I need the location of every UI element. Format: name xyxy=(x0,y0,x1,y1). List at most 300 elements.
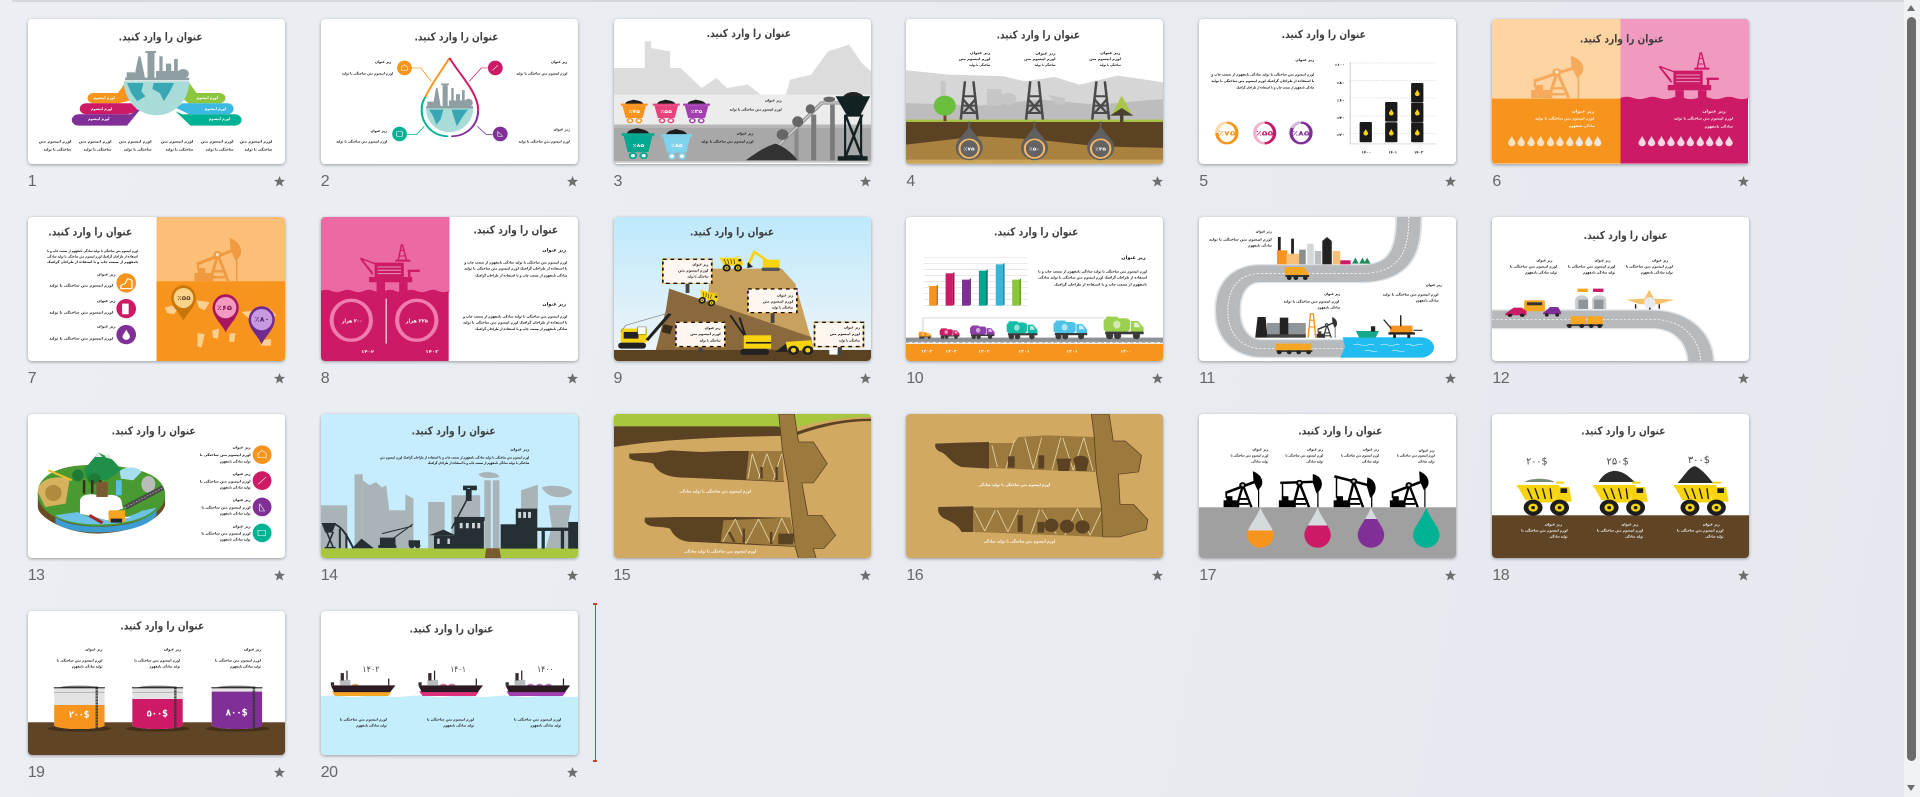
captions: زیر عنوان xyxy=(1307,448,1324,452)
ship magenta xyxy=(418,670,483,696)
slide number 1: 1 xyxy=(28,173,36,190)
slide 14: industrial skyline xyxy=(321,414,578,558)
percent labels: ٪۷۵ xyxy=(628,110,640,115)
star 15 xyxy=(860,570,871,580)
gauge labels xyxy=(964,147,1107,152)
title: عنوان را وارد کنید. xyxy=(689,225,774,238)
star 4 xyxy=(1152,176,1163,186)
ring labels: ٪۷۵ xyxy=(1219,129,1236,138)
captions: سادگی نامفهوم xyxy=(1416,298,1439,302)
top ribbon shadow xyxy=(12,0,1904,2)
pill labels xyxy=(88,96,230,121)
captions: تولید سادگی نامفهوم xyxy=(71,663,103,668)
prices: ۲۰۰$ xyxy=(1527,455,1548,466)
scroll down arrow xyxy=(1907,785,1915,791)
captions: تولید سادگی xyxy=(1418,459,1435,463)
percent labels: ٪۵۵ xyxy=(660,110,672,115)
text block xyxy=(1039,255,1148,286)
captions: لورم ایپسوم متن ساختگی با xyxy=(1341,453,1380,457)
slide 2: oil drop xyxy=(321,19,578,164)
right arms xyxy=(175,83,241,126)
axis labels: ۱۴۰۲ xyxy=(1414,152,1424,156)
scrollbar xyxy=(1904,0,1920,797)
pumpjack xyxy=(194,238,241,281)
ring labels: ۲۰۰ هزار xyxy=(341,318,362,324)
captions: زیر عنوان xyxy=(1703,110,1727,114)
text block: با استفاده از طراحان گرافیک لورم ایپسوم متن ساختگی با تولید xyxy=(1212,79,1315,83)
star 3 xyxy=(860,176,871,186)
captions: ساختگی با تولید xyxy=(123,147,152,152)
ring labels xyxy=(1219,129,1310,138)
year labels: ۱۴۰۳ xyxy=(946,348,958,353)
captions: تولید سادگی نامفهوم xyxy=(220,484,251,489)
hopper tower xyxy=(835,92,870,161)
sign text: لورم ایپسوم متن xyxy=(829,331,860,336)
drop outline xyxy=(421,58,478,137)
insertion marker xyxy=(593,603,597,762)
axis labels: ٪۲۰ xyxy=(1337,134,1345,138)
axis labels: ٪۱۰۰ xyxy=(1335,64,1345,68)
captions: لورم ایپسوم متن xyxy=(1024,57,1057,61)
captions: لورم ایپسوم متن ساختگی با تولید سادگی xyxy=(979,482,1051,487)
gauge labels: ٪۲۵ xyxy=(1096,147,1107,152)
slide number 7: 7 xyxy=(28,370,36,387)
offshore rig xyxy=(1660,53,1719,101)
slide 15: mine cross-section A xyxy=(614,414,870,558)
slide 12: road with vehicles xyxy=(1492,217,1749,361)
slide number 2: 2 xyxy=(321,173,329,190)
axis labels: ٪۸۰ xyxy=(1337,82,1345,86)
pumpjacks xyxy=(1224,471,1429,507)
color panels xyxy=(1492,19,1749,164)
drop scale left xyxy=(1508,136,1602,147)
pumpjack xyxy=(1317,317,1337,337)
van and cars xyxy=(1506,300,1561,317)
captions xyxy=(340,717,562,727)
captions xyxy=(1510,259,1674,274)
prices: ۳۰۰$ xyxy=(1688,454,1710,465)
slide 3: coal carts xyxy=(614,19,870,164)
landscape layers xyxy=(906,71,1163,164)
captions: تولید سادگی نامفهوم xyxy=(530,723,561,727)
captions: ساختگی با تولید xyxy=(205,147,233,152)
refinery bottom xyxy=(1256,313,1316,337)
captions: ساختگی با تولید xyxy=(83,147,111,152)
text block: زیر عنوان xyxy=(1296,59,1315,63)
captions: سادگی نامفهوم xyxy=(1248,243,1272,247)
ground bands xyxy=(614,95,870,163)
captions: لورم ایپسوم متن ساختگی با xyxy=(1231,453,1269,457)
road xyxy=(1228,217,1409,348)
star 19 xyxy=(274,767,285,778)
captions: زیر عنوان xyxy=(97,298,115,303)
captions: ساختگی با تولید xyxy=(970,63,991,67)
sign text: ساختگی با تولید xyxy=(687,273,708,278)
slide number 10: 10 xyxy=(906,370,923,387)
slide 11: winding road supply chain xyxy=(1199,217,1456,361)
wave marks xyxy=(1354,344,1423,351)
percent labels xyxy=(628,109,702,149)
captions: تولید سادگی xyxy=(1550,534,1568,538)
captions: ساختگی با تولید xyxy=(165,147,193,152)
ring labels: ۱۴۰۲ xyxy=(361,349,374,354)
captions: ساختگی با تولید xyxy=(1035,63,1056,67)
coal tower and conveyor xyxy=(322,523,353,548)
icon discs xyxy=(116,273,136,344)
captions xyxy=(1535,110,1734,129)
captions: زیر عنوان xyxy=(1426,283,1443,287)
axis labels: ۱۴۰۱ xyxy=(1389,152,1397,156)
ground xyxy=(28,722,285,755)
captions: لورم ایپسوم متن ساختگی با تولید xyxy=(336,139,388,144)
tanker truck xyxy=(1567,316,1603,328)
captions: زیر عنوان xyxy=(1545,523,1563,527)
progress rings xyxy=(1217,123,1311,144)
ring labels: ۲۲۵ هزار xyxy=(405,318,428,324)
slide number 17: 17 xyxy=(1199,567,1216,584)
captions: لورم ایپسوم متن xyxy=(239,140,273,144)
captions: تولید سادگی xyxy=(1362,459,1380,463)
ground xyxy=(1492,515,1749,558)
captions: سادگی نامفهوم xyxy=(1569,124,1595,128)
slide number 18: 18 xyxy=(1492,567,1509,584)
slide number 19: 19 xyxy=(28,764,44,781)
lower tunnel xyxy=(938,506,1103,537)
forest and mountains xyxy=(72,452,122,497)
trucks xyxy=(1517,481,1729,515)
prices: ۲۵۰$ xyxy=(1607,455,1629,466)
pill labels: لورم ایپسوم xyxy=(204,107,226,111)
title: عنوان را وارد کنید. xyxy=(409,622,493,635)
divider xyxy=(385,298,386,343)
captions: لورم ایپسوم متن ساختگی با تولید سادگی xyxy=(679,489,751,493)
title: عنوان را وارد کنید. xyxy=(111,424,195,437)
tank values: ۲۰۰$ xyxy=(69,709,89,720)
captions xyxy=(701,98,782,144)
intro text: لورم ایپسوم متن ساختگی با تولید سادگی نامفهوم از صنعت چاپ و با xyxy=(47,248,138,253)
star 5 xyxy=(1445,176,1456,186)
captions: زیر عنوان xyxy=(1653,259,1669,263)
slide 18: dump trucks xyxy=(1492,414,1749,558)
refinery silhouette xyxy=(125,51,189,81)
slide 6: land and sea oil xyxy=(1492,19,1749,164)
slide number 5: 5 xyxy=(1199,173,1208,190)
captions: لورم ایپسوم متن ساختگی با تولید سادگی xyxy=(684,549,756,553)
dump trucks xyxy=(695,256,743,307)
slide number 9: 9 xyxy=(614,370,622,387)
captions: تولید سادگی نامفهوم xyxy=(149,663,180,668)
captions: لورم ایپسوم متن ساختگی با xyxy=(340,717,387,721)
bar chart xyxy=(924,257,1028,305)
hill xyxy=(614,268,870,361)
pumpjack xyxy=(1532,56,1584,98)
captions: لورم ایپسوم متن xyxy=(959,57,991,61)
derricks xyxy=(961,82,1109,120)
tank purple xyxy=(211,685,262,729)
plant windows xyxy=(437,512,531,544)
shaft xyxy=(1092,414,1148,537)
star 11 xyxy=(1445,373,1456,384)
hazard signs xyxy=(662,259,863,346)
text block: سادگی نامفهوم از صنعت چاپ و با استفاده از طراحان گرافیک xyxy=(1237,86,1315,90)
captions: تولید سادگی نامفهوم xyxy=(1641,270,1674,274)
captions: لورم ایپسوم متن xyxy=(119,140,152,144)
captions: سادگی نامفهوم xyxy=(1318,305,1341,309)
slide number 4: 4 xyxy=(906,173,915,190)
captions: زیر عنوان xyxy=(164,647,181,651)
intro text: استفاده از طراحان گرافیک لورم ایپسوم متن ساختگی با تولید سادگی xyxy=(47,254,138,258)
world map xyxy=(164,300,276,347)
title: عنوان را وارد کنید. xyxy=(1580,33,1664,46)
captions xyxy=(679,489,756,553)
text block 2: زیر عنوان xyxy=(542,301,566,307)
year labels: ۱۴۰۲ xyxy=(979,348,990,353)
pin labels: ٪۶۵ xyxy=(217,303,232,311)
title: عنوان را وارد کنید. xyxy=(411,424,495,437)
captions: تولید سادگی xyxy=(1626,534,1644,538)
sign text: زیر عنوان xyxy=(844,324,860,329)
island ring xyxy=(38,465,165,533)
sign text: زیر عنوان xyxy=(692,261,708,266)
captions: تولید سادگی نامفهوم xyxy=(443,723,474,727)
captions: زیر عنوان xyxy=(232,445,250,449)
captions: زیر عنوان xyxy=(553,127,570,132)
truck top xyxy=(1285,267,1309,280)
captions: لورم ایپسوم متن ساختگی با xyxy=(1626,264,1674,268)
slide 20: tanker ships xyxy=(321,611,578,755)
captions: زیر عنوان xyxy=(1363,448,1380,452)
slide 13: isometric island xyxy=(28,414,285,558)
year labels xyxy=(921,348,1132,353)
pill labels: لورم ایپسوم xyxy=(93,96,115,100)
left panels xyxy=(321,217,449,361)
captions: زیر عنوان xyxy=(97,271,115,276)
slide 4: oil derricks xyxy=(906,19,1163,164)
globe xyxy=(426,108,473,133)
prices xyxy=(1527,454,1710,466)
tank orange xyxy=(53,685,105,729)
captions: زیر عنوان xyxy=(232,471,250,476)
rig and ship xyxy=(89,510,125,523)
surface layers xyxy=(614,414,870,447)
icons xyxy=(392,61,507,142)
title: عنوان را وارد کنید. xyxy=(48,226,132,238)
ground xyxy=(321,548,578,558)
captions: تولید سادگی نامفهوم xyxy=(1584,270,1616,274)
carts xyxy=(620,100,710,160)
water xyxy=(321,695,581,755)
captions: تولید سادگی نامفهوم xyxy=(220,536,251,541)
star 7 xyxy=(274,373,285,384)
text block: زیر عنوان xyxy=(510,446,529,451)
captions xyxy=(336,60,570,144)
slide number 3: 3 xyxy=(614,173,622,190)
gauge labels: ٪۵۰ xyxy=(1030,147,1040,152)
slide number 15: 15 xyxy=(614,567,630,584)
sign text xyxy=(678,261,860,342)
text block: زیر عنوان xyxy=(1122,255,1146,260)
years: ۱۴۰۱ xyxy=(450,665,466,674)
captions: تولید سادگی نامفهوم xyxy=(1525,270,1558,274)
coal pile xyxy=(352,538,374,548)
captions: لورم ایپسوم متن ساختگی با تولید سادگی xyxy=(984,539,1056,543)
captions: لورم ایپسوم متن ساختگی با xyxy=(1286,453,1324,457)
years xyxy=(362,665,553,674)
sign text: لورم ایپسوم متن xyxy=(762,298,793,303)
background mountains and plant xyxy=(614,42,870,100)
sky xyxy=(321,414,578,558)
year labels: ۱۴۰۱ xyxy=(1019,348,1030,353)
ship orange xyxy=(331,670,395,696)
captions: لورم ایپسوم متن xyxy=(160,140,194,144)
tank values: ۸۰۰$ xyxy=(225,707,247,718)
slide 7: world map pins xyxy=(28,217,285,361)
trees xyxy=(934,96,1134,122)
ring labels: ٪۸۵ xyxy=(1293,129,1310,138)
star 12 xyxy=(1738,373,1749,384)
captions: ساختگی با تولید xyxy=(1100,63,1121,67)
slide 19: storage tanks xyxy=(28,611,285,755)
captions xyxy=(1522,523,1724,538)
captions xyxy=(200,445,251,541)
captions: زیر عنوان xyxy=(1253,448,1269,452)
slide 5: barrels chart xyxy=(1199,19,1456,164)
star 18 xyxy=(1738,570,1749,580)
captions: لورم ایپسوم متن ساختگی با xyxy=(215,657,261,662)
slide 8: offshore rig comparison xyxy=(321,217,578,361)
captions: لورم ایپسوم متن ساختگی با xyxy=(427,717,474,721)
captions: لورم ایپسوم متن ساختگی با xyxy=(201,504,251,509)
title: عنوان را وارد کنید. xyxy=(1584,229,1668,242)
captions: زیر عنوان xyxy=(1101,51,1122,55)
star 2 xyxy=(567,176,578,186)
captions: لورم ایپسوم متن ساختگی با xyxy=(1678,528,1724,532)
captions: زیر عنوان xyxy=(1419,449,1435,453)
captions: تولید سادگی نامفهوم xyxy=(220,458,251,463)
pin labels: ٪۵۵ xyxy=(177,294,190,301)
captions: لورم ایپسوم متن ساختگی با xyxy=(1597,528,1644,532)
star 10 xyxy=(1152,373,1163,384)
captions: زیر عنوان xyxy=(736,131,754,136)
captions xyxy=(1231,448,1435,463)
sign posts xyxy=(685,283,841,356)
captions xyxy=(1209,230,1443,309)
ground band xyxy=(1199,507,1456,558)
captions: زیر عنوان xyxy=(370,129,387,133)
slide 10: bars and tankers xyxy=(906,217,1163,361)
intro text: نامفهوم از صنعت چاپ و با استفاده از طراحان گرافیک xyxy=(47,259,138,264)
tank magenta xyxy=(132,685,183,729)
lower workers and carts xyxy=(1018,515,1090,533)
crane center xyxy=(730,315,771,355)
text block: لورم ایپسوم متن ساختگی با تولید سادگی نامفهوم از صنعت چاپ و xyxy=(1211,73,1315,77)
title: عنوان را وارد کنید. xyxy=(994,225,1079,238)
airplane xyxy=(1627,289,1675,309)
sign text: زیر عنوان xyxy=(704,325,721,330)
pill labels: لورم ایپسوم xyxy=(196,96,218,100)
text block xyxy=(1211,59,1315,90)
percent labels: ٪۸۵ xyxy=(632,144,644,149)
text block 1 xyxy=(463,247,568,277)
coal loads xyxy=(1525,466,1713,483)
slide number 20: 20 xyxy=(321,764,337,781)
percent labels: ٪۸۵ xyxy=(670,144,683,149)
conveyor xyxy=(745,97,840,161)
star 1 xyxy=(274,176,285,186)
captions: زیر عنوان xyxy=(244,647,261,651)
gray skyline xyxy=(321,472,572,548)
upper tunnel xyxy=(936,435,1096,472)
title: عنوان را وارد کنید. xyxy=(118,31,202,43)
upper workers and carts xyxy=(1008,455,1089,471)
captions: زیر عنوان xyxy=(375,60,391,64)
axis labels: ۱۴۰۰ xyxy=(1362,152,1371,156)
captions: زیر عنوان xyxy=(1703,523,1721,527)
captions: ساختگی با تولید xyxy=(43,147,71,152)
road xyxy=(1492,319,1701,361)
text block 2 xyxy=(462,301,568,331)
captions: تولید سادگی نامفهوم xyxy=(220,510,251,515)
captions: زیر عنوان xyxy=(1595,259,1611,263)
captions: لورم ایپسوم متن ساختگی با xyxy=(1568,264,1616,268)
background plant silhouettes xyxy=(941,82,1065,106)
star 14 xyxy=(567,570,578,580)
captions: لورم ایپسوم متن ساختگی با xyxy=(200,478,251,483)
captions: لورم ایپسوم متن xyxy=(78,140,112,144)
scroll up arrow xyxy=(1907,5,1915,11)
captions: زیر عنوان xyxy=(85,647,102,651)
captions: تولید سادگی xyxy=(1706,534,1724,538)
captions: لورم ایپسوم متن ساختگی با xyxy=(201,530,251,535)
captions: لورم ایپسوم متن ساختگی با xyxy=(56,657,103,662)
soil background xyxy=(906,414,1163,558)
pin labels: ٪۸۰ xyxy=(254,315,269,323)
captions: لورم ایپسوم متن ساختگی با تولید xyxy=(49,282,113,287)
slide number 8: 8 xyxy=(321,370,329,387)
year labels: ۱۴۰۳ xyxy=(921,348,933,353)
star 16 xyxy=(1152,570,1163,580)
text block 1: زیر عنوان xyxy=(542,247,566,253)
sign text: زیر عنوان xyxy=(777,293,793,297)
star 9 xyxy=(860,373,871,384)
captions: ساختگی با تولید xyxy=(244,147,272,152)
slide number 6: 6 xyxy=(1492,173,1501,190)
pill labels: لورم ایپسوم xyxy=(209,117,230,121)
donut rings xyxy=(331,300,436,340)
axis labels xyxy=(1335,64,1424,156)
title: عنوان را وارد کنید. xyxy=(997,29,1080,42)
right panels xyxy=(156,217,285,361)
captions: زیر عنوان xyxy=(764,98,782,103)
captions: سادگی نامفهوم xyxy=(1705,125,1733,129)
quarry xyxy=(38,470,71,507)
year labels: ۱۴۰۰ xyxy=(1121,348,1132,353)
underground gauges xyxy=(957,122,1114,160)
captions xyxy=(979,482,1056,543)
title: عنوان را وارد کنید. xyxy=(1282,29,1366,42)
title: عنوان را وارد کنید. xyxy=(120,619,204,632)
captions: زیر عنوان xyxy=(1324,292,1341,296)
sign text: لورم ایپسوم متن xyxy=(690,331,721,336)
mining shovel left xyxy=(618,312,672,348)
star 6 xyxy=(1738,176,1749,186)
shaft xyxy=(778,414,835,558)
captions: لورم ایپسوم متن xyxy=(200,140,234,144)
tank values: ۵۰۰$ xyxy=(146,708,168,719)
soil background xyxy=(614,414,870,558)
ring labels: ۱۴۰۳ xyxy=(425,349,438,354)
captions: لورم ایپسوم متن ساختگی با تولید xyxy=(49,335,113,340)
